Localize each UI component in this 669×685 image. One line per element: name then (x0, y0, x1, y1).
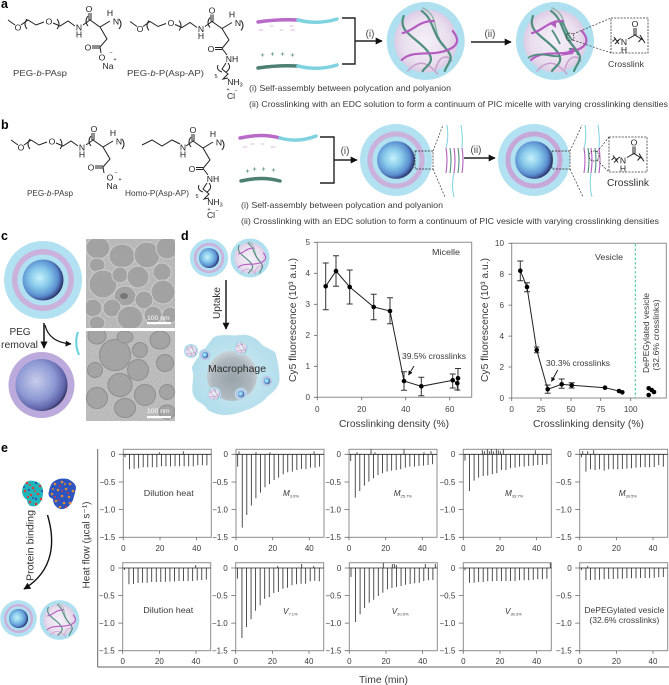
annotation: DePEGylated vesicle: DePEGylated vesicle (641, 293, 651, 373)
ITC plot: M39.5%: 39.5% (626, 493, 637, 498)
x tick labels: 25 (536, 405, 546, 414)
zoomed membrane i (415, 125, 463, 197)
y tick labels: 1 (305, 362, 310, 371)
vesicle icon (190, 239, 228, 277)
crosslink callout (597, 137, 650, 189)
structure: PEG-b-PAsp: N (79, 142, 85, 152)
ITC plot: V30.3%: 0 (451, 564, 456, 573)
ITC plot: V30.3%: −1.0 (440, 619, 456, 628)
ITC plot: M3.9% (212, 449, 324, 553)
ITC plot: V20.9%: 20.9% (397, 612, 409, 616)
ITC plot: V7.1%: 40 (305, 657, 314, 666)
structure: PEG-b-P(Asp-AP): O (208, 44, 215, 54)
ITC plot: M39.5%: 0 (577, 544, 582, 553)
structure: Homo-P(Asp-AP): 5 (195, 194, 199, 200)
structure: Homo-P(Asp-AP): H (180, 150, 186, 160)
ITC plot: V30.3%: V (505, 607, 510, 616)
x tick labels: 100 (624, 405, 638, 414)
ITC plot: DePEGylated vesicle: 40 (649, 657, 658, 666)
ITC plot: V30.3%: 0 (461, 657, 466, 666)
x tick labels: 75 (596, 405, 606, 414)
structure: PEG-b-PAsp: PEG- b-PAsp (13, 68, 67, 78)
annotation: DePEGylated vesicle: (32.6% crosslinks) (651, 299, 661, 370)
ITC plot: DePEGylated vesicle: 20 (612, 657, 621, 666)
ITC plot: M25.7%: −1.0 (325, 505, 342, 514)
structure: PEG-b-PAsp: O (18, 142, 25, 152)
ITC plot: V20.9%: −1.5 (326, 646, 342, 656)
line chart: micelle (288, 238, 472, 430)
x tick labels (315, 405, 455, 414)
structure: PEG-b-PAsp: O (85, 42, 92, 52)
ITC plot: M3.9%: 0 (234, 544, 239, 553)
arrow (ii) (464, 145, 495, 158)
ITC plot: V7.1%: 0 (223, 564, 228, 573)
ITC plot: Dilution heat top: 0 (121, 544, 126, 553)
ITC plot: M33.7%: 0 (451, 450, 456, 459)
structure: PEG-b-P(Asp-AP): H (198, 31, 204, 41)
structure: PEG-b-PAsp: + (118, 177, 122, 183)
structure: PEG-b-P(Asp-AP): H (229, 10, 235, 20)
caption: PEG-b-PAsp: PEG-b-PAsp (27, 188, 73, 198)
structure: PEG-b-P(Asp-AP) (127, 6, 243, 101)
ITC plot: M33.7%: 20 (496, 544, 505, 553)
ITC plot: Dilution heat bottom: −0.5 (99, 592, 115, 600)
ITC plot: Dilution heat bottom: −1.5 (99, 646, 115, 656)
micelle before crosslinking (387, 2, 465, 80)
cryo-TEM image bottom (86, 328, 175, 421)
polymer strands (240, 136, 316, 181)
ITC plot: Dilution heat bottom: 20 (155, 657, 164, 666)
crosslinked vesicle (498, 124, 570, 196)
micelle icon (230, 238, 270, 278)
y axis title: Cy5 fluorescence (10³ a.u.) (288, 258, 299, 382)
structure: PEG-b-PAsp: O (46, 16, 53, 26)
polymer strands (258, 19, 337, 68)
ITC plot: V20.9%: 20 (382, 657, 391, 666)
structure: PEG-b-PAsp (11, 124, 124, 191)
structure: PEG-b-PAsp: O (15, 22, 22, 32)
ITC plot: V20.9%: 0 (347, 657, 352, 666)
ITC plot: Dilution heat bottom: 0 (120, 657, 125, 666)
ITC plot: M3.9%: −1.5 (212, 533, 229, 542)
structure: PEG-b-PAsp: O (99, 52, 106, 62)
crosslink callout: Crosslink (607, 178, 650, 189)
structure: PEG-b-P(Asp-AP): 3 (240, 82, 243, 88)
x axis title: Crosslinking density (%) (533, 419, 644, 430)
structure: Homo-P(Asp-AP): N (180, 142, 186, 152)
structure: PEG-b-PAsp: O (86, 4, 93, 14)
label b: b (1, 118, 9, 132)
ITC plot: M25.7%: 0 (347, 544, 352, 553)
ITC plot: Dilution heat bottom: 0 (110, 564, 115, 573)
structure: PEG-b-P(Asp-AP): O (168, 18, 175, 28)
ITC plot: V30.3%: 30.3% (510, 612, 522, 616)
y tick labels: 2 (305, 331, 310, 340)
PEG removal label: removal (1, 340, 38, 351)
x tick labels: 50 (566, 405, 576, 414)
y tick labels (495, 239, 504, 403)
structure: PEG-b-P(Asp-AP): O (137, 24, 144, 34)
structure: PEG-b-PAsp: + (113, 57, 117, 63)
ITC plot: M25.7%: −1.5 (325, 533, 342, 542)
ITC plot: M33.7%: 33.7% (512, 493, 524, 498)
ITC plot: Dilution heat top: 0 (111, 450, 116, 459)
crosslink callout: Crosslink (608, 59, 645, 69)
x axis title: Crosslinking density (%) (339, 419, 449, 430)
ITC plot: M25.7%: 25.7% (401, 493, 412, 498)
dePEGylated vesicle (8, 352, 74, 418)
ITC plot: Dilution heat top: Dilution heat (144, 488, 194, 498)
ITC plot: M3.9%: 0 (224, 450, 229, 459)
ITC plot: M39.5%: M (619, 489, 626, 498)
ITC plot: DePEGylated vesicle: 0 (567, 564, 572, 573)
ITC plot: V30.3%: 40 (532, 657, 542, 666)
ITC plot: DePEGylated vesicle: DePEGylated vesicle (584, 605, 665, 615)
ITC plot: Dilution heat top: −1.5 (100, 533, 116, 542)
ITC plot: M39.5%: 0 (567, 450, 572, 459)
structure: Homo-P(Asp-AP): NH (207, 197, 220, 207)
ITC plot: M25.7%: 40 (418, 544, 427, 553)
y axis title: heat flow: Heat flow (µcal s⁻¹) (82, 502, 92, 588)
annotation: 39.5% crosslinks (402, 351, 466, 375)
PEG removal label: PEG (9, 327, 31, 338)
structure: PEG-b-P(Asp-AP): 5 (214, 74, 218, 80)
ITC plot: M39.5%: 40 (649, 544, 658, 553)
label c: c (1, 229, 8, 243)
ITC plot: V20.9%: V (392, 607, 397, 616)
structure: PEG-b-P(Asp-AP): NH (227, 77, 240, 87)
structure: PEG-b-P(Asp-AP): N (235, 18, 241, 28)
ITC plot: M33.7%: −1.5 (440, 533, 456, 542)
dePEGylated separator (634, 244, 636, 398)
ITC plot: V7.1%: −0.5 (212, 592, 228, 600)
x tick labels (509, 405, 638, 414)
ITC plot: M3.9%: 40 (305, 544, 314, 553)
ITC plot: V20.9%: −1.0 (326, 619, 342, 628)
ITC plot: DePEGylated vesicle: (32.6% crosslinks) (589, 615, 660, 625)
ITC plot: DePEGylated vesicle (556, 563, 668, 666)
ITC plot: M33.7%: 0 (461, 544, 466, 553)
ITC plot: M39.5%: 20 (612, 544, 621, 553)
cryo-TEM image top: 100 nm (147, 315, 170, 322)
y tick labels: 3 (305, 300, 310, 309)
y tick labels: 0 (499, 394, 504, 403)
structure: PEG-b-PAsp: Na (102, 61, 114, 71)
structure: PEG-b-P(Asp-AP): Cl (227, 91, 235, 101)
structure: Homo-P(Asp-AP): O (190, 125, 197, 135)
ITC plot: M3.9%: 3.9% (290, 493, 299, 498)
ITC plot: M3.9%: M (283, 489, 290, 498)
y tick labels: 5 (305, 238, 310, 247)
structure: PEG-b-PAsp: H (79, 150, 85, 160)
ITC plot: V7.1%: V (283, 607, 288, 616)
structure: PEG-b-P(Asp-AP): PEG- b-P(Asp-AP) (127, 68, 204, 78)
error bars (323, 256, 461, 396)
structure: Homo-P(Asp-AP): 3 (220, 202, 223, 208)
uptake arrow (212, 280, 226, 329)
structure: PEG-b-PAsp: H (110, 128, 116, 138)
y tick labels: 0 (305, 393, 310, 402)
cryo-TEM image bottom: 100 nm (147, 408, 170, 415)
ITC plot: M25.7%: −0.5 (325, 478, 342, 487)
protein icons (22, 478, 76, 509)
chart title: Micelle: Micelle (432, 247, 460, 257)
macrophage (184, 335, 279, 415)
chart title: Vesicle: Vesicle (595, 252, 623, 262)
label e: e (1, 441, 8, 455)
structure: PEG-b-PAsp: O (107, 172, 114, 182)
vesicle (4, 241, 82, 319)
ITC plot: M39.5% (556, 449, 668, 553)
y tick labels: 10 (495, 239, 504, 248)
caption a (249, 83, 668, 109)
structure: PEG-b-PAsp (8, 4, 121, 78)
structure: Homo-P(Asp-AP): NH (207, 174, 219, 184)
arrow (ii): (ii) (485, 29, 495, 40)
ITC plot: M39.5%: −1.5 (556, 533, 572, 542)
ITC plot: DePEGylated vesicle: −1.0 (556, 619, 572, 628)
ITC plot: V30.3%: −0.5 (440, 592, 456, 600)
ITC plot: V30.3%: 20 (496, 657, 505, 666)
structure: Homo-P(Asp-AP): O (189, 164, 196, 174)
vesicle icon (0, 600, 37, 637)
ITC plot: M25.7%: M (394, 489, 401, 498)
structure: PEG-b-P(Asp-AP): + (226, 87, 230, 93)
panel a: micelle scheme (1, 0, 668, 109)
crosslink callout (566, 18, 648, 69)
label d: d (181, 229, 189, 243)
ITC plot: M39.5%: −0.5 (556, 478, 572, 487)
y tick labels: 8 (499, 270, 504, 279)
ITC plot: Dilution heat bottom (99, 563, 211, 666)
ITC plot: M25.7% (325, 449, 437, 553)
structure: PEG-b-PAsp: N (116, 136, 122, 146)
structure: PEG-b-PAsp: O (91, 124, 98, 134)
caption b: (ii) Crosslinking with an EDC solution to form a continuum of PIC vesicle with varying crosslinking densities (241, 216, 659, 226)
ITC plot: V7.1%: 0 (233, 657, 238, 666)
ITC plot: Dilution heat bottom: −1.0 (99, 619, 115, 628)
ITC plot: DePEGylated vesicle: −1.5 (556, 646, 572, 656)
data line (520, 271, 622, 392)
structure: PEG-b-PAsp: − (114, 170, 118, 176)
annotation: 39.5% crosslinks: 39.5% crosslinks (402, 351, 466, 361)
ITC plot: V20.9%: −0.5 (326, 592, 342, 600)
panel e: protein binding and ITC (0, 441, 669, 685)
ITC plot: V7.1%: −1.0 (212, 619, 228, 628)
outer axes bracket (98, 449, 669, 667)
chart frame (512, 243, 666, 398)
ITC plot: M39.5%: −1.0 (556, 505, 572, 514)
ITC plot: Dilution heat top (100, 449, 211, 553)
structure: PEG-b-PAsp: H (76, 30, 82, 40)
arrow (ii) (471, 29, 511, 42)
structure: Homo-P(Asp-AP): + (207, 207, 211, 213)
ITC plot: V20.9% (326, 563, 437, 666)
micelle icon (40, 600, 79, 640)
annotation: 30.3% crosslinks (546, 358, 610, 382)
caption a: (ii) Crosslinking with an EDC solution to form a continuum of PIC micelle with varying crosslinking densities (249, 99, 668, 109)
structure: PEG-b-P(Asp-AP): − (234, 88, 238, 94)
uptake arrow: Uptake (212, 287, 223, 319)
structure: PEG-b-PAsp: N (113, 16, 119, 26)
structure: Homo-P(Asp-AP) (125, 125, 224, 220)
ITC plot: DePEGylated vesicle: 0 (577, 657, 582, 666)
caption a: (i) Self-assembly between polycation and polyanion (249, 83, 451, 93)
ITC plot: Dilution heat bottom: 40 (192, 657, 201, 666)
structure: Homo-P(Asp-AP): Homo-P(Asp-AP) (125, 188, 189, 198)
y tick labels: 4 (499, 332, 504, 341)
caption b (241, 200, 659, 226)
PEG removal label (1, 327, 38, 351)
x tick labels: 0 (315, 405, 320, 414)
y tick labels: 6 (499, 301, 504, 310)
annotation: 30.3% crosslinks: 30.3% crosslinks (546, 358, 610, 368)
cryo-TEM image top (84, 237, 178, 330)
structure: PEG-b-PAsp: Na (106, 181, 118, 191)
y tick labels: 2 (499, 363, 504, 372)
axis ticks (508, 243, 631, 401)
y tick labels: 4 (305, 269, 310, 278)
bracket and arrow (i): (i) (341, 146, 349, 157)
ITC plot: V7.1%: −1.5 (212, 646, 228, 656)
data line (326, 271, 458, 386)
bracket and arrow (i) (320, 137, 357, 183)
structure: PEG-b-P(Asp-AP): N (198, 24, 204, 34)
y tick labels (305, 238, 310, 402)
ITC plot: M3.9%: −1.0 (212, 505, 229, 514)
annotation: DePEGylated vesicle (641, 293, 661, 373)
macrophage: Macrophage (208, 364, 266, 375)
ITC plot: DePEGylated vesicle: −0.5 (556, 592, 572, 600)
protein binding arrow (24, 510, 52, 589)
ITC plot: M33.7% (440, 449, 551, 553)
structure: Homo-P(Asp-AP): N (216, 138, 222, 148)
y axis title: Cy5 fluorescence (10³ a.u.) (480, 258, 491, 382)
structure: Homo-P(Asp-AP): H (210, 129, 216, 139)
structure: PEG-b-P(Asp-AP): O (209, 6, 216, 16)
protein binding arrow: Protein binding (26, 510, 36, 581)
ITC plot: M3.9%: −0.5 (212, 478, 229, 487)
ITC plot: M3.9%: 20 (268, 544, 278, 553)
ITC plot: Dilution heat top: 40 (192, 544, 202, 553)
structure: PEG-b-PAsp: − (109, 50, 113, 56)
ITC plot: V7.1%: 7.1% (288, 612, 298, 616)
PEG removal arrows (44, 323, 79, 355)
panel c: PEG removal and cryo-TEM (1, 229, 178, 421)
zoomed membrane ii (552, 125, 600, 197)
panel b: vesicle scheme (1, 118, 659, 226)
line chart: vesicle (480, 239, 666, 430)
structure: PEG-b-PAsp: H (107, 8, 113, 18)
x tick labels: 0 (509, 405, 514, 414)
bracket and arrow (i): (i) (366, 29, 374, 40)
ITC plot: V30.3%: −1.5 (440, 646, 456, 656)
ITC plot: V20.9%: 0 (337, 564, 342, 573)
structure: Homo-P(Asp-AP): Cl (207, 210, 215, 220)
ITC plot: M25.7%: 0 (337, 450, 342, 459)
ITC plot: Dilution heat bottom: Dilution heat (143, 605, 194, 615)
x tick labels: 60 (445, 405, 455, 414)
x tick labels: 40 (401, 405, 411, 414)
structure: Homo-P(Asp-AP): − (215, 208, 219, 214)
ITC plot: M33.7%: 40 (532, 544, 542, 553)
x tick labels: 20 (357, 405, 367, 414)
panel d: uptake (181, 229, 666, 430)
data points (518, 268, 656, 397)
ITC plot: M33.7%: M (505, 489, 512, 498)
bracket and arrow (i) (342, 18, 382, 64)
caption b: (i) Self-assembly between polycation and polyanion (241, 200, 443, 210)
structure: PEG-b-PAsp: O (49, 136, 56, 146)
chart frame (317, 242, 472, 397)
structure: PEG-b-P(Asp-AP): NH (226, 54, 238, 64)
structure: PEG-b-PAsp: N (76, 22, 82, 32)
ITC plot: Dilution heat top: −1.0 (100, 505, 116, 514)
crosslinked micelle (516, 2, 594, 80)
ITC plot: M25.7%: 20 (381, 544, 391, 553)
ITC plot: Dilution heat top: −0.5 (100, 478, 116, 487)
data points (323, 269, 460, 389)
ITC plot: M33.7%: −1.0 (440, 505, 456, 514)
arrow (ii): (ii) (471, 145, 481, 156)
ITC plot: V7.1%: 20 (268, 657, 277, 666)
ITC plot: Dilution heat top: 20 (156, 544, 165, 553)
axis ticks (314, 242, 450, 400)
error bars (517, 261, 575, 393)
ITC plot: V7.1% (212, 563, 324, 666)
vesicle before crosslinking (360, 124, 432, 196)
ITC plot: V20.9%: 40 (418, 657, 428, 666)
ITC plot: M33.7%: −0.5 (440, 478, 456, 487)
ITC plot: V30.3% (440, 563, 551, 666)
structure: PEG-b-PAsp: O (88, 162, 95, 172)
